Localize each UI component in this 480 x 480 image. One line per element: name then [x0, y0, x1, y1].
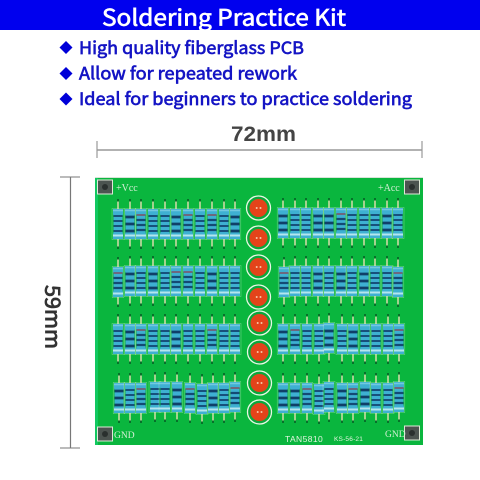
silkscreen labels: TAN5810 — [285, 434, 323, 444]
title banner: Soldering Practice Kit — [102, 0, 347, 32]
width dimension: 72mm: 72mm — [231, 122, 296, 146]
mounting pad: bottom right — [404, 426, 420, 440]
silkscreen labels: GND — [114, 431, 135, 441]
silkscreen labels: +Acc — [378, 183, 400, 194]
bullet: repeated rework: Allow for repeated rework — [79, 60, 298, 84]
title banner — [0, 0, 480, 32]
mounting pad: top right — [404, 180, 420, 194]
bullet: fiberglass PCB: High quality fiberglass PCB — [79, 34, 304, 59]
bullet list — [60, 34, 412, 110]
PCB board — [95, 177, 423, 445]
resistor row 2 left — [112, 256, 241, 307]
resistor row 3 left — [112, 314, 241, 364]
silkscreen labels: GND — [385, 430, 406, 440]
resistor row 4 left — [113, 372, 241, 424]
resistor row 2 right — [278, 256, 404, 307]
resistor row 3 right — [277, 313, 405, 364]
bullet: ideal for beginners: Ideal for beginners to practice soldering — [79, 85, 412, 110]
silkscreen labels: +Vcc — [116, 183, 138, 194]
resistor row 4 right — [277, 372, 405, 424]
resistor row 1 left — [112, 199, 241, 249]
mounting pad: top left — [97, 180, 113, 194]
board base — [95, 177, 423, 445]
silkscreen labels: KS-56-21 — [334, 436, 363, 443]
silkscreen labels — [114, 183, 406, 444]
height dimension: 59mm: 59mm — [40, 285, 70, 349]
height dimension: 59mm — [40, 177, 80, 448]
width dimension: 72mm — [97, 122, 422, 158]
mounting pad: bottom left — [97, 426, 113, 442]
resistor row 1 right — [277, 198, 404, 248]
LED column — [246, 196, 272, 424]
